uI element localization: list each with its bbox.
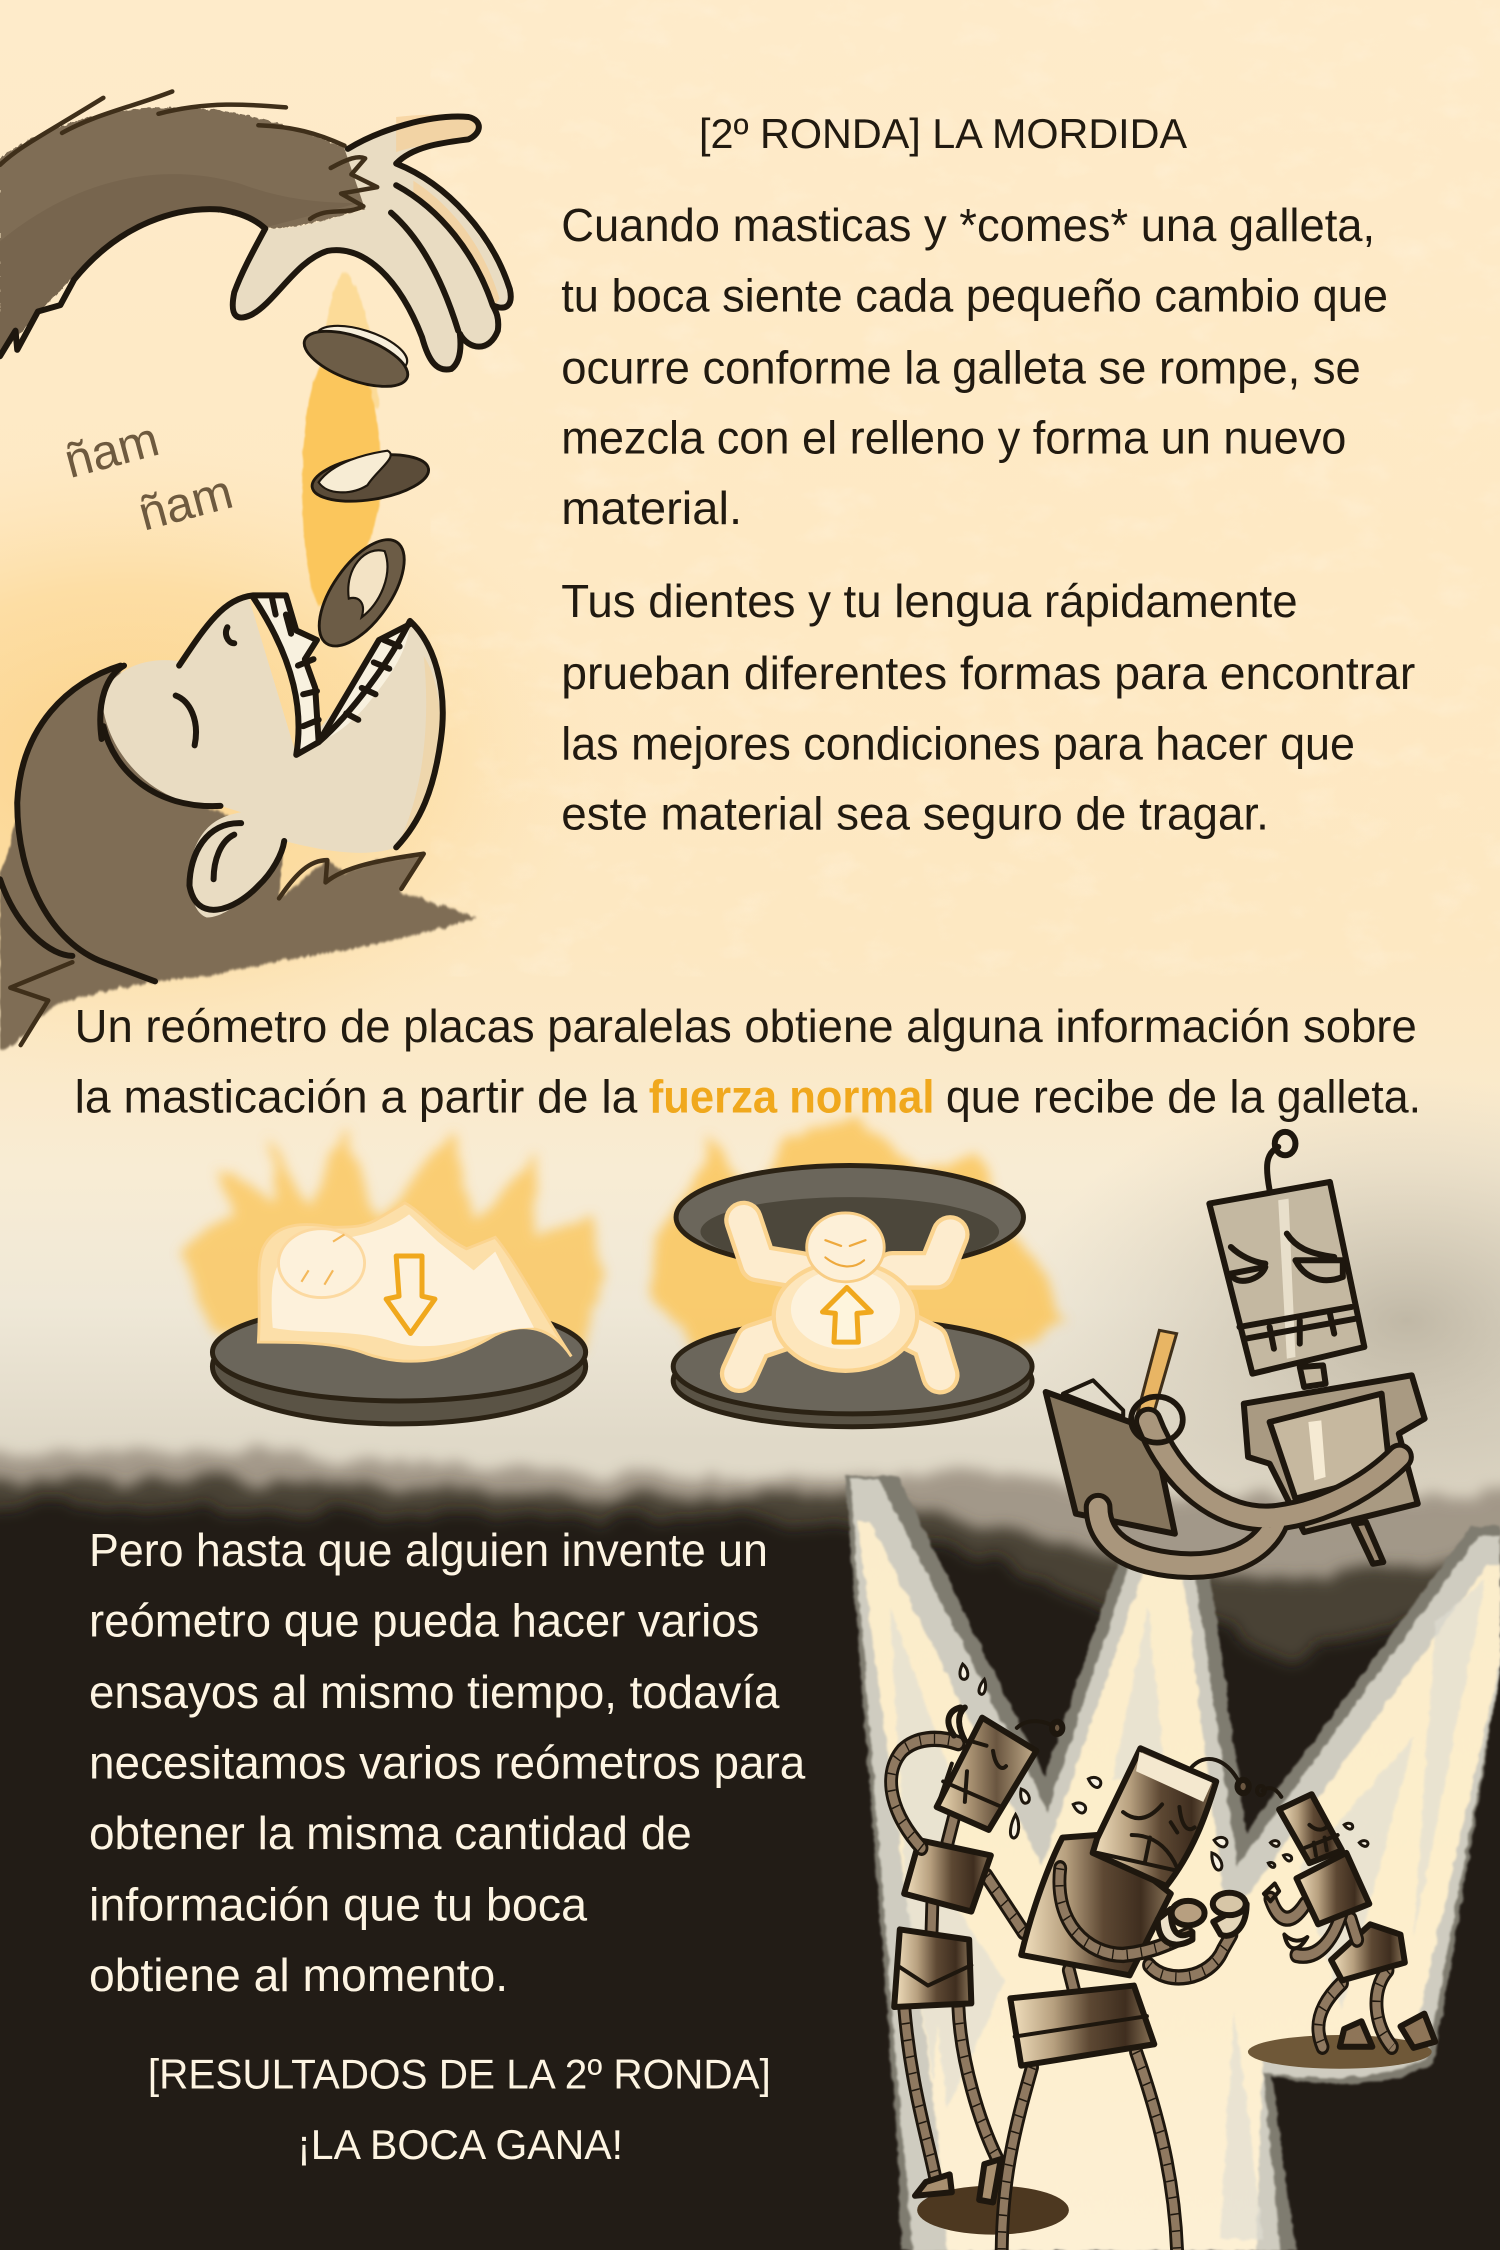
spotlight beams bbox=[845, 1476, 1500, 2250]
monkey head bbox=[0, 595, 477, 1050]
round result callout: [RESULTADOS DE LA 2º RONDA] bbox=[148, 2051, 771, 2098]
text block: need for multiple rheometers: Pero hasta que alguien invente un bbox=[89, 1524, 768, 1576]
highlighted term: fuerza normal bbox=[649, 1070, 934, 1122]
sound effect text: ñam bbox=[133, 465, 238, 542]
text block: chewing intro: material. bbox=[561, 482, 742, 534]
glow behind falling cookies bbox=[302, 273, 381, 606]
orange burst left bbox=[179, 1127, 603, 1378]
text block: teeth and tongue: Tus dientes y tu lengua rápidamente bbox=[561, 575, 1298, 627]
round result callout bbox=[148, 2051, 771, 2168]
text block: teeth and tongue: prueban diferentes formas para encontrar bbox=[561, 647, 1415, 699]
text block: parallel-plate rheometer: la masticación a partir de la bbox=[75, 1070, 638, 1122]
notebook bbox=[1046, 1392, 1175, 1534]
text block: need for multiple rheometers: obtiene al momento. bbox=[89, 1949, 508, 2001]
robot 2 bbox=[1002, 1748, 1249, 2250]
bottom plate left bbox=[212, 1303, 586, 1424]
text block: need for multiple rheometers bbox=[89, 1524, 806, 2001]
down arrow bbox=[386, 1256, 435, 1333]
text block: parallel-plate rheometer: que recibe de la galleta. bbox=[946, 1070, 1421, 1122]
text block: chewing intro bbox=[561, 199, 1388, 534]
monkey arm and hand bbox=[0, 91, 511, 370]
text block: teeth and tongue bbox=[561, 575, 1415, 840]
sound effect text: ñam bbox=[59, 412, 164, 489]
bottom plate right bbox=[673, 1319, 1032, 1427]
text block: parallel-plate rheometer bbox=[75, 1000, 1421, 1122]
robot 1 bbox=[891, 1664, 1062, 2202]
text block: parallel-plate rheometer: Un reómetro de placas paralelas obtiene alguna información sobre bbox=[75, 1000, 1417, 1052]
illustration: three tired robots in spotlights bbox=[891, 1664, 1435, 2250]
text block: teeth and tongue: las mejores condiciones para hacer que bbox=[561, 717, 1355, 769]
pencil bbox=[1136, 1330, 1177, 1420]
illustration: robot taking notes bbox=[1046, 1132, 1425, 1566]
text block: need for multiple rheometers: obtener la misma cantidad de bbox=[89, 1807, 692, 1859]
robot head bbox=[1209, 1182, 1364, 1374]
text block: need for multiple rheometers: ensayos al mismo tiempo, todavía bbox=[89, 1666, 780, 1718]
text block: chewing intro: ocurre conforme la galleta se rompe, se bbox=[561, 341, 1361, 393]
orange burst right bbox=[649, 1117, 1065, 1364]
illustration: monkey catching cookie pieces bbox=[0, 91, 511, 1050]
robot torso bbox=[1244, 1375, 1425, 1532]
robot stand bbox=[1354, 1522, 1383, 1564]
text block: chewing intro: Cuando masticas y *comes* una galleta, bbox=[561, 199, 1375, 251]
robot arm bbox=[1098, 1397, 1400, 1566]
text block: need for multiple rheometers: información que tu boca bbox=[89, 1879, 588, 1931]
cookie piece 2 bbox=[309, 448, 432, 508]
cookie piece 3 bbox=[303, 526, 421, 660]
text block: chewing intro: mezcla con el relleno y forma un nuevo bbox=[561, 412, 1346, 464]
robot 3 bbox=[1257, 1786, 1435, 2048]
squashed filling bbox=[258, 1203, 571, 1361]
floor shadows bbox=[917, 2035, 1432, 2235]
illustration: cookie filling pressed flat between plates bbox=[179, 1117, 1065, 1427]
text block: teeth and tongue: este material sea seguro de tragar. bbox=[561, 788, 1269, 840]
up arrow bbox=[822, 1288, 871, 1342]
strong filling figure bbox=[739, 1213, 950, 1375]
robot neck bbox=[1300, 1365, 1326, 1387]
dark lower background with smoky edge bbox=[0, 1450, 1500, 2250]
top plate right bbox=[676, 1166, 1023, 1269]
title: [2º RONDA] LA MORDIDA bbox=[699, 110, 1187, 157]
text block: need for multiple rheometers: necesitamos varios reómetros para bbox=[89, 1736, 806, 1788]
text block: need for multiple rheometers: reómetro que pueda hacer varios bbox=[89, 1594, 759, 1646]
round result callout: ¡LA BOCA GANA! bbox=[297, 2121, 623, 2168]
sound effect text bbox=[59, 412, 238, 542]
text block: chewing intro: tu boca siente cada pequeño cambio que bbox=[561, 269, 1388, 321]
cookie piece 1 bbox=[297, 316, 415, 398]
